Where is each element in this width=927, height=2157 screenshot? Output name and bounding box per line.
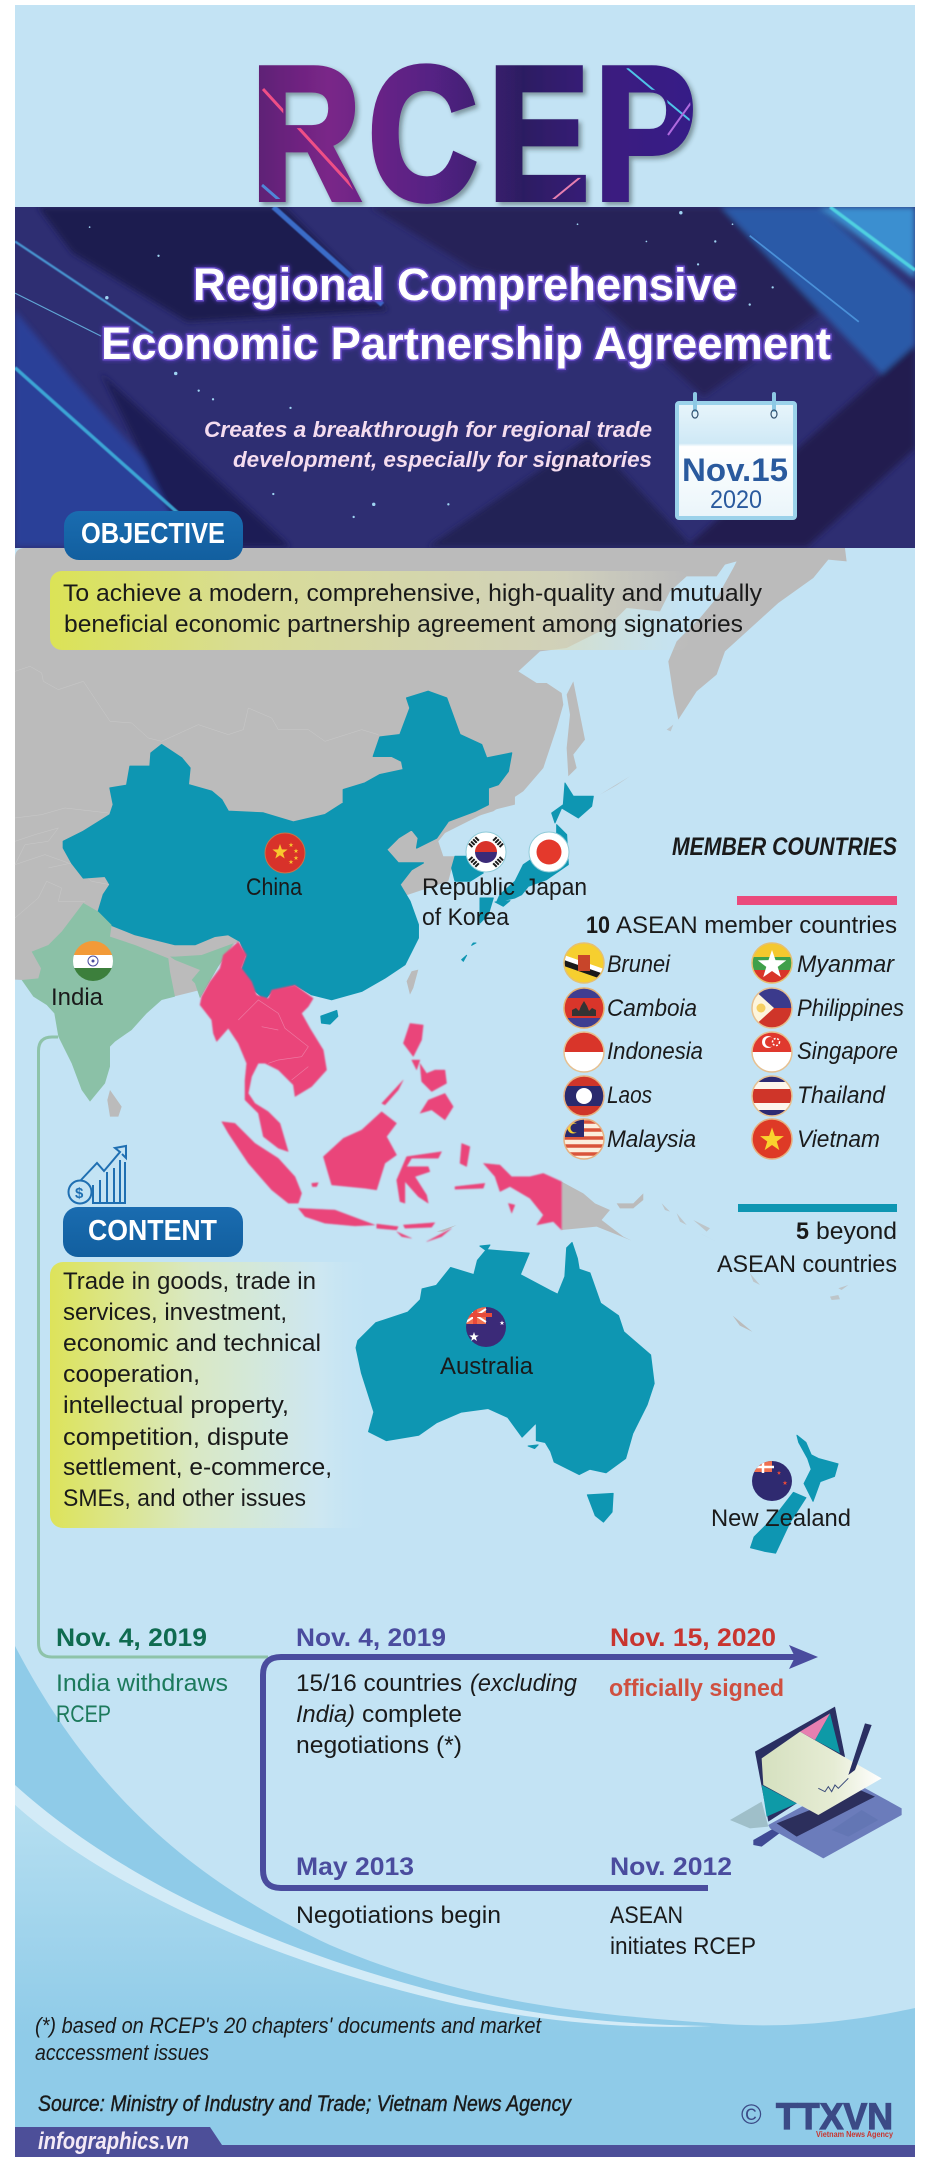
flag: New Zealand — [752, 1461, 792, 1501]
label: Republic of Korea: Republic — [422, 874, 515, 901]
icon: laptop with signed document — [730, 1707, 902, 1858]
year: 2020: 2020 — [710, 486, 762, 514]
bottom bar with site name — [15, 2127, 915, 2157]
label: Australia: Australia — [440, 1353, 534, 1380]
flag: Japan — [529, 832, 569, 872]
timeline: ASEAN initiates RCEP: ASEAN — [610, 1902, 683, 1929]
Laos — [564, 1076, 652, 1116]
label: New Zealand: New Zealand — [711, 1505, 851, 1532]
Laos: Laos — [607, 1082, 652, 1109]
bottom bar with site name: infographics.vn — [38, 2128, 189, 2155]
timeline: negotiations complete: complete — [362, 1701, 462, 1728]
legend: 5 beyond ASEAN countries: beyond — [816, 1218, 897, 1245]
heading: full agreement name — [101, 259, 831, 369]
objective text box — [50, 571, 762, 650]
flag: China — [265, 833, 305, 873]
timeline: officially signed: Nov. 15, 2020 — [610, 1624, 776, 1652]
date: Nov.15: Nov.15 — [682, 452, 788, 488]
timeline: India withdraws: India withdraws — [56, 1670, 228, 1697]
objective pill: OBJECTIVE — [81, 518, 225, 550]
Singapore: Singapore — [797, 1038, 898, 1065]
label: India: India — [51, 984, 104, 1011]
logo: TTXVN: Vietnam News Agency — [816, 2130, 893, 2139]
timeline: officially signed — [609, 1624, 784, 1702]
content text: economic and technical — [63, 1330, 321, 1357]
Singapore — [752, 1032, 898, 1072]
ASEAN member countries — [200, 942, 562, 1242]
Indonesia: Indonesia — [607, 1038, 703, 1065]
icon: growth chart and coin: $ — [75, 1185, 84, 1202]
Thailand: Thailand — [797, 1082, 886, 1109]
timeline: negotiations complete: negotiations (*) — [296, 1732, 462, 1759]
footnote: (*) based on RCEP's 20 chapters' documents and market — [35, 2013, 542, 2038]
map labels — [51, 874, 851, 1532]
label: Republic of Korea: of Korea — [422, 904, 510, 931]
content text: services, investment, — [63, 1299, 287, 1326]
legend: beyond-ASEAN colour bar — [738, 1204, 897, 1212]
footnote — [35, 2013, 542, 2065]
content pill — [63, 1207, 243, 1257]
Thailand — [752, 1076, 886, 1116]
map — [15, 548, 848, 1553]
timeline: negotiations begin: Negotiations begin — [296, 1902, 501, 1929]
logo: TTXVN: TTXVN — [776, 2096, 893, 2137]
Vietnam: Vietnam — [797, 1126, 880, 1153]
objective text box: beneficial economic partnership agreement among signatories — [64, 611, 743, 638]
country: Australia and New Zealand — [356, 1242, 838, 1553]
label: China: China — [246, 874, 303, 901]
country: Korea and Japan — [452, 783, 593, 961]
content text: Trade in goods, trade in — [63, 1268, 316, 1295]
content text — [63, 1268, 332, 1512]
timeline: negotiations complete — [296, 1624, 578, 1759]
subtitle — [204, 417, 652, 472]
content text box background — [50, 1262, 370, 1528]
label: Japan: Japan — [525, 874, 587, 901]
background waves — [15, 1646, 915, 2157]
heading: full agreement name: Economic Partnership Agreement — [101, 318, 831, 369]
legend: 10 ASEAN member countries: ASEAN member countries — [616, 912, 897, 939]
legend: 10 ASEAN member countries: 10 — [586, 912, 610, 939]
footnote: acccessment issues — [35, 2040, 209, 2065]
Philippines: Philippines — [797, 995, 904, 1022]
Philippines — [752, 988, 904, 1028]
flag: India — [73, 941, 113, 981]
timeline: negotiations complete: 15/16 countries — [296, 1670, 462, 1697]
Brunei — [564, 943, 671, 983]
Myanmar: Myanmar — [797, 951, 895, 978]
timeline: negotiations begin — [296, 1853, 501, 1929]
timeline: negotiations begin: May 2013 — [296, 1853, 414, 1881]
objective pill — [64, 511, 243, 560]
objective text box: To achieve a modern, comprehensive, high-quality and mutually — [63, 580, 762, 607]
ASEAN internal borders — [238, 1000, 308, 1080]
timeline: ASEAN initiates RCEP — [610, 1853, 756, 1960]
Indonesia — [564, 1032, 703, 1072]
timeline: negotiations complete: India) — [296, 1701, 355, 1728]
content text: intellectual property, — [63, 1392, 289, 1419]
Vietnam — [752, 1119, 880, 1159]
subtitle: development, especially for signatories — [233, 447, 652, 472]
ASEAN flag list — [564, 943, 904, 1159]
Malaysia — [564, 1119, 696, 1159]
green India connector line — [38, 1037, 268, 1657]
timeline: negotiations complete: Nov. 4, 2019 — [296, 1624, 446, 1652]
timeline: India withdraws: Nov. 4, 2019 — [56, 1624, 207, 1652]
icon: growth chart and coin — [68, 1146, 126, 1204]
content text: cooperation, — [63, 1361, 200, 1388]
legend: ASEAN colour bar — [737, 896, 897, 905]
title: RCEP — [258, 63, 699, 207]
icon: calendar — [677, 392, 795, 518]
Camboia: Camboia — [607, 995, 697, 1022]
legend: 5 beyond ASEAN countries: 5 — [796, 1218, 809, 1245]
source: Source: Ministry of Industry and Trade; Vietnam News Agency — [38, 2091, 573, 2116]
content text: competition, dispute — [63, 1424, 289, 1451]
timeline: India withdraws — [56, 1624, 228, 1728]
country: India — [22, 903, 233, 1102]
Brunei: Brunei — [607, 951, 671, 978]
timeline: officially signed: officially signed — [609, 1675, 784, 1702]
content text: settlement, e-commerce, — [63, 1454, 332, 1481]
banner background — [15, 207, 915, 548]
legend: 5 beyond ASEAN countries: ASEAN countries — [717, 1251, 897, 1278]
timeline: negotiations complete: (excluding — [470, 1670, 578, 1697]
logo: TTXVN: © — [741, 2099, 762, 2130]
content pill: CONTENT — [88, 1215, 217, 1247]
timeline: India withdraws: RCEP — [56, 1701, 111, 1728]
legend: 5 beyond ASEAN countries — [717, 1218, 897, 1278]
flag: Republic of Korea — [466, 832, 506, 872]
Camboia — [564, 988, 697, 1028]
title: RCEP: RCEP — [251, 28, 696, 240]
timeline arrow — [263, 1645, 818, 1888]
timeline: ASEAN initiates RCEP: initiates RCEP — [610, 1933, 756, 1960]
subtitle: Creates a breakthrough for regional trade — [204, 417, 652, 442]
country: China — [63, 691, 512, 1024]
label: Republic of Korea — [422, 874, 515, 931]
flag: Australia — [466, 1307, 506, 1347]
timeline: ASEAN initiates RCEP: Nov. 2012 — [610, 1853, 732, 1881]
heading: full agreement name: Regional Comprehensive — [193, 259, 737, 310]
land: surrounding countries — [15, 548, 848, 1332]
Malaysia: Malaysia — [607, 1126, 696, 1153]
Myanmar — [752, 943, 895, 983]
internal borders — [15, 666, 378, 918]
content text: SMEs, and other issues — [63, 1485, 306, 1512]
